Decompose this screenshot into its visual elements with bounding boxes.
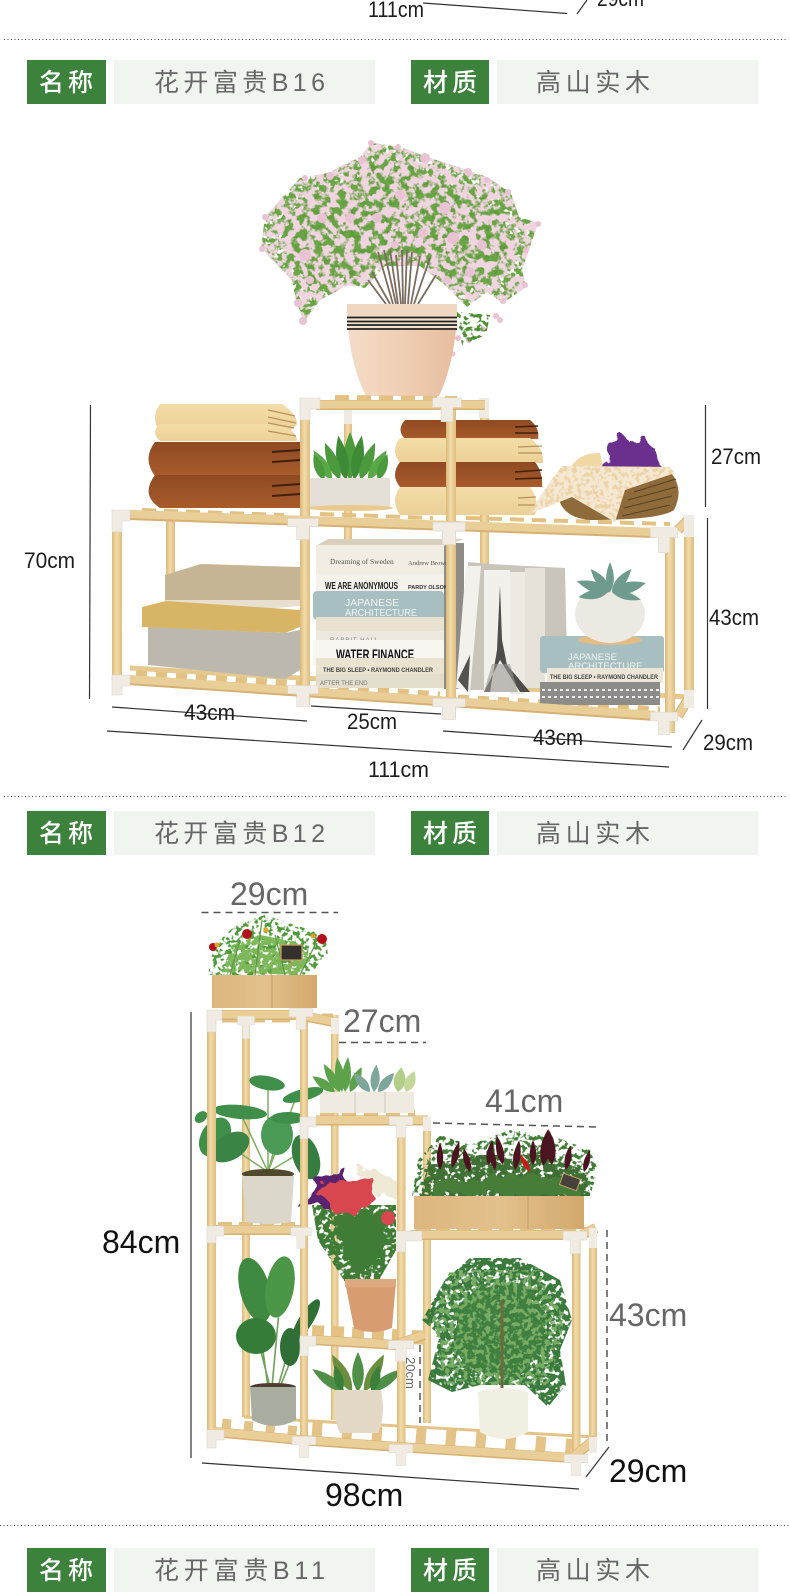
folded towels, right stack: [395, 420, 543, 515]
shelf B12 back structure: [218, 1015, 597, 1453]
info bar: B11: [27, 1548, 758, 1592]
info bar: B12: 花开富贵B12: [154, 820, 330, 848]
book stack: ARCHITECTURE: [345, 607, 417, 619]
upright books with Eiffel tower: [456, 562, 567, 694]
info bar: B11: 花开富贵B11: [154, 1557, 330, 1585]
B12 dimensions: 98cm: [325, 1477, 403, 1513]
stems: [368, 250, 436, 304]
B12 dimensions: 84cm: [102, 1224, 180, 1260]
B16 dimensions: [24, 405, 761, 782]
succulent in white pot: [307, 432, 393, 511]
info bar: B11: 高山实木: [536, 1557, 655, 1585]
shelf B16 back structure: [130, 398, 694, 710]
boxes: [142, 564, 300, 679]
info bar: B12: 材质: [423, 820, 481, 848]
book stack: WATER FINANCE: [336, 646, 414, 662]
B16 dimensions: 29cm: [703, 730, 753, 755]
succulent box: [310, 1057, 419, 1113]
potted flowering plant: [259, 140, 541, 396]
info bar: B16: 花开富贵B16: [154, 69, 330, 97]
folded towels, left stack: [148, 404, 300, 508]
book stack: THE BIG SLEEP • RAYMOND CHANDLER: [323, 668, 434, 674]
small potted plant on books: THE BIG SLEEP • RAYMOND CHANDLER: [550, 675, 659, 681]
book stack: RABBIT HALL: [330, 638, 379, 644]
plant tag: [281, 945, 302, 968]
info bar: B12: 高山实木: [536, 820, 655, 848]
B12 dimensions: 20cm: [403, 1357, 418, 1389]
plant tag: [559, 1173, 581, 1200]
shelf B12 front frame: [207, 1008, 597, 1476]
small potted plant on books: ARCHITECTURE: [568, 661, 642, 672]
big-leaf plant in white pot: [192, 1073, 325, 1224]
book stack: AFTER THE END: [320, 681, 368, 687]
B12 dimensions: 27cm: [343, 1003, 421, 1039]
B16 dimensions: 43cm: [184, 700, 235, 725]
info bar: B16: 高山实木: [536, 69, 655, 97]
book stack: JAPANESE: [345, 597, 399, 609]
info bar: B11: 材质: [423, 1557, 481, 1585]
info bar: B16: [27, 60, 758, 104]
B16 dimensions: 111cm: [368, 757, 429, 782]
agave in ceramic pot: [309, 1352, 406, 1433]
shelf B16 front frame: [112, 398, 694, 735]
book stack: PARDY OLSON: [408, 585, 448, 591]
small potted plant on books: JAPANESE: [568, 652, 617, 663]
tropical plant in grey pot: [232, 1254, 325, 1426]
small potted plant on books: [540, 562, 664, 705]
info bar: B12: [27, 811, 758, 855]
info bar: B16: 材质: [423, 69, 481, 97]
book stack: [313, 539, 464, 689]
B12 dimensions: 29cm: [230, 876, 308, 912]
book stack: WE ARE ANONYMOUS: [325, 580, 398, 592]
flowering crown: [259, 140, 541, 356]
previous section dimension fragment: [368, 0, 644, 22]
terracotta pot: [348, 330, 456, 396]
B12 dimensions: [102, 876, 687, 1513]
B16 dimensions: 25cm: [347, 709, 397, 734]
B12 dimensions: 43cm: [609, 1297, 687, 1333]
book stack: Dreaming of Sweden: [330, 557, 394, 566]
wicker basket with cloth and purple flower: [529, 433, 679, 522]
wooden planter with tomato plant: [208, 915, 328, 1008]
book stack: Andrew Brown: [408, 560, 449, 567]
info bar: B16: 名称: [39, 69, 97, 97]
monstera in white pot: [422, 1258, 572, 1439]
hibiscus in terracotta pot: [296, 1168, 408, 1332]
info bar: B12: 名称: [39, 820, 97, 848]
B12 dimensions: 41cm: [485, 1083, 563, 1119]
info bar: B11: 名称: [39, 1557, 97, 1585]
B16 dimensions: 43cm: [709, 605, 759, 630]
planter with chili plants: [412, 1128, 598, 1229]
B16 dimensions: 43cm: [533, 725, 583, 750]
B12 dimensions: 29cm: [609, 1453, 687, 1489]
B16 dimensions: 70cm: [24, 548, 75, 573]
B16 dimensions: 27cm: [711, 444, 761, 469]
